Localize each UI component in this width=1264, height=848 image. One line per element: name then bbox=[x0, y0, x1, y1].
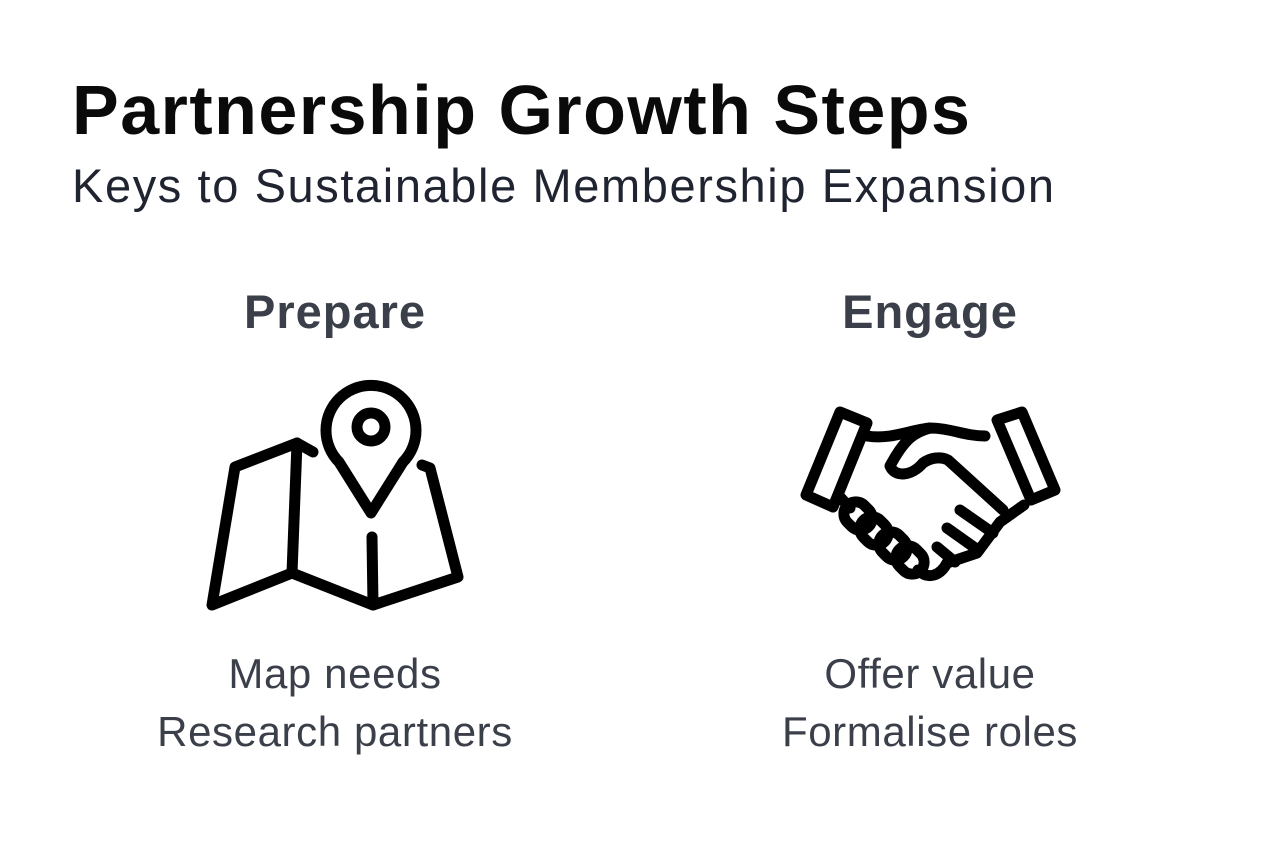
text: engage points: Offer value bbox=[824, 650, 1036, 697]
title: Partnership Growth Steps bbox=[72, 71, 971, 149]
text: engage points bbox=[782, 650, 1078, 755]
heading: engage: Engage bbox=[842, 285, 1018, 338]
text: prepare points: Research partners bbox=[157, 708, 513, 755]
subtitle: Keys to Sustainable Membership Expansion bbox=[72, 159, 1056, 212]
heading: prepare: Prepare bbox=[244, 285, 426, 338]
text: engage points: Formalise roles bbox=[782, 708, 1078, 755]
text: prepare points: Map needs bbox=[228, 650, 442, 697]
text: prepare points bbox=[157, 650, 513, 755]
